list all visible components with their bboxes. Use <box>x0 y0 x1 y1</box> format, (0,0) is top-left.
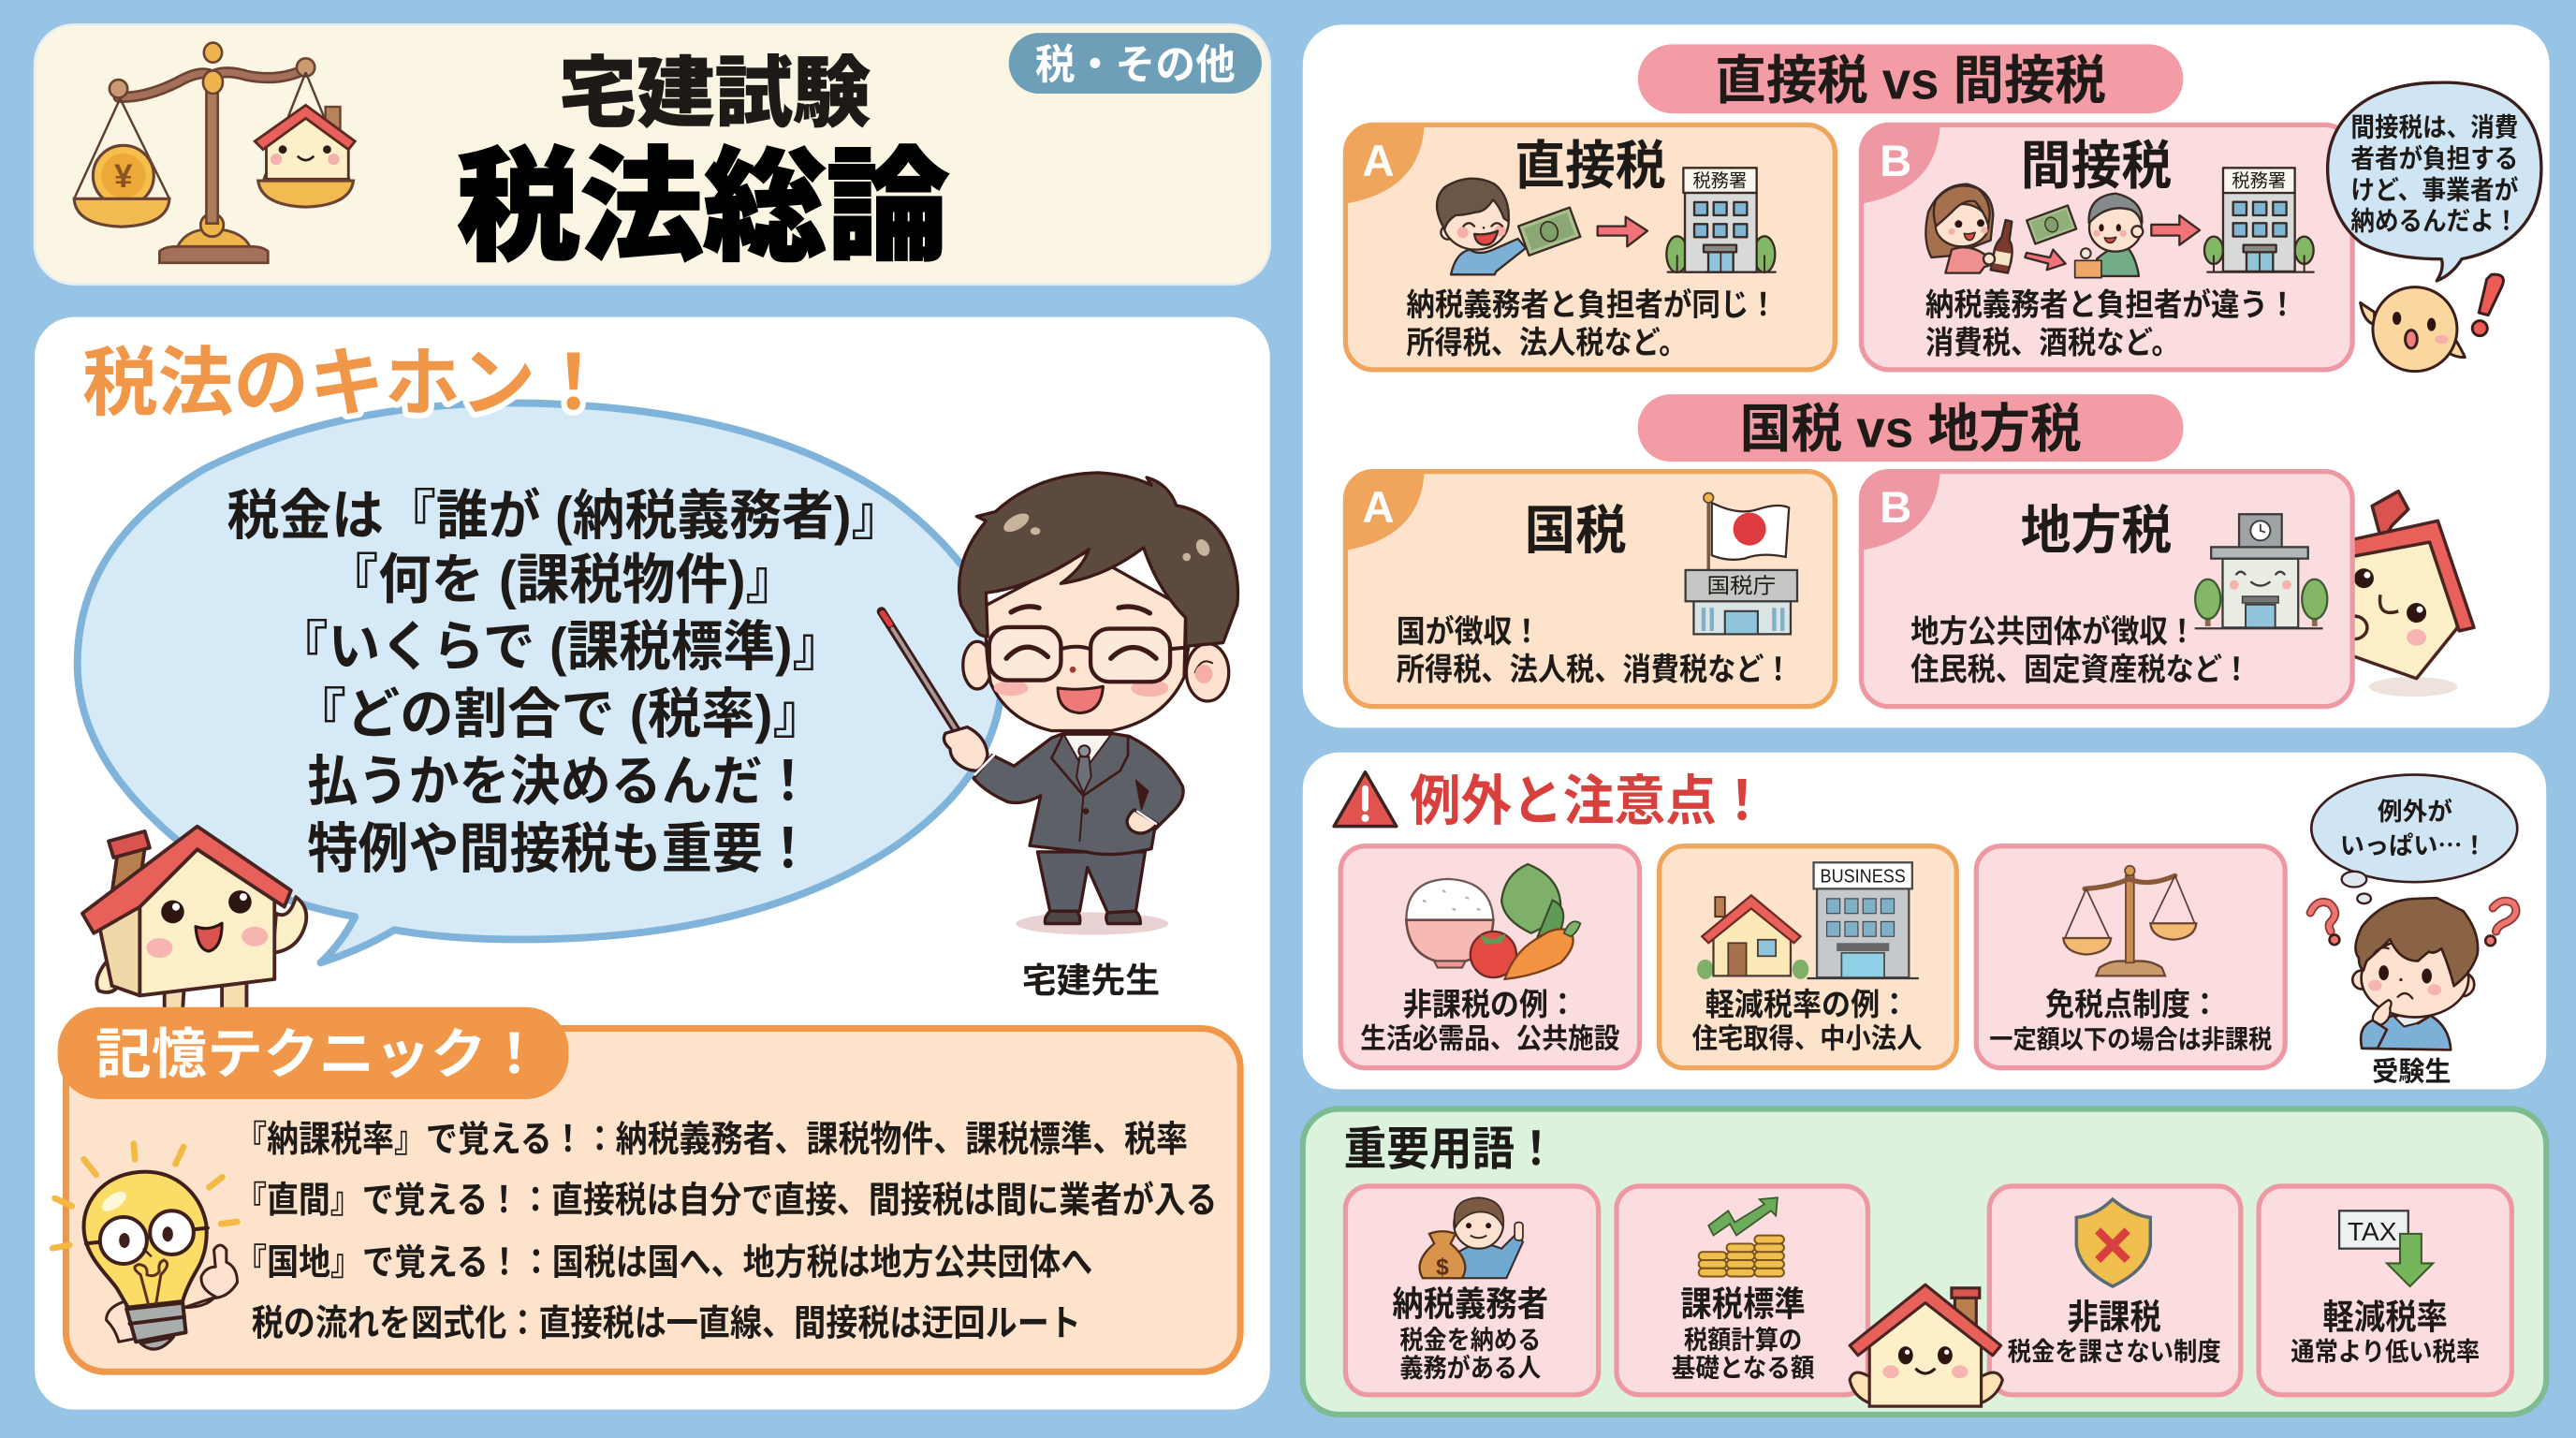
icon: house and business building: BUSINESS <box>1821 866 1906 887</box>
card title: 間接税 <box>2021 137 2172 196</box>
card: taxpayer <box>1345 1186 1599 1395</box>
character: peeking house <box>2333 492 2474 697</box>
card: reduced tax rate <box>2259 1186 2511 1395</box>
icon: flag and National Tax Agency <box>1686 492 1797 634</box>
card: reduced rate example <box>1660 846 1956 1068</box>
card text: 非課税の例： <box>1403 988 1577 1022</box>
card text: 一定額以下の場合は非課税 <box>1989 1025 2272 1054</box>
term text: 納税義務者 <box>1392 1285 1548 1324</box>
technique list <box>235 1120 1218 1344</box>
icon: house and business building <box>1697 862 1919 979</box>
title: 宅建試験: 宅建試験 <box>559 51 871 137</box>
technique list: 税の流れを図式化：直接税は一直線、間接税は迂回ルート <box>252 1304 1081 1344</box>
card title: 地方税 <box>2021 501 2172 560</box>
character: teacher <box>882 473 1237 935</box>
heading: 重要用語: 重要用語！ <box>1344 1124 1558 1175</box>
term text: 通常より低い税率 <box>2291 1337 2480 1366</box>
heading: 例外と注意点: 例外と注意点！ <box>1410 772 1767 832</box>
icon: warning triangle <box>1334 772 1397 827</box>
corner badge A: A <box>1362 137 1395 186</box>
bubble text: 納めるんだよ！ <box>2350 207 2518 236</box>
corner badge B: B <box>1880 137 1911 186</box>
icon: TAX sign with down arrow: TAX <box>2348 1217 2397 1246</box>
bubble text: 『何を (課税物件)』 <box>326 550 798 610</box>
corner badge A <box>1345 472 1425 550</box>
bubble text: 税金は『誰が (納税義務者)』 <box>227 486 903 546</box>
label: 宅建先生: 宅建先生 <box>1022 961 1160 1000</box>
character: house mascot <box>1850 1284 2002 1406</box>
icon: person paying tax office: 税務署 <box>1692 170 1747 191</box>
term text: 課税標準 <box>1680 1285 1806 1324</box>
category tag: 税・その他 <box>1035 42 1236 88</box>
icon: flag and National Tax Agency: 国税庁 <box>1706 573 1776 597</box>
label: 受験生: 受験生 <box>2372 1058 2451 1088</box>
card: indirect tax <box>1861 125 2352 370</box>
card: local tax <box>1861 472 2352 707</box>
card text <box>1397 614 1793 687</box>
card text: 軽減税率の例： <box>1705 988 1909 1022</box>
character: house mascot <box>82 827 306 1012</box>
icon: person paying tax office <box>1437 168 1776 274</box>
comparison pill: national vs local: 国税 vs 地方税 <box>1740 399 2082 458</box>
term text: 税額計算の <box>1684 1326 1802 1355</box>
character: surprised mascot <box>2361 274 2503 372</box>
card text: 所得税、法人税など。 <box>1406 326 1687 360</box>
term text <box>2291 1299 2480 1366</box>
panel: memory techniques <box>52 1007 1240 1372</box>
card title: 国税 <box>1525 501 1626 560</box>
comparison pill: national vs local <box>1638 394 2183 462</box>
corner badge A: A <box>1362 483 1395 533</box>
corner badge A <box>1345 125 1425 204</box>
technique list: 『国地』で覚える！：国税は国へ、地方税は地方公共団体へ <box>235 1243 1092 1284</box>
card text: 免税点制度： <box>2045 988 2219 1022</box>
comparison pill: direct vs indirect <box>1638 44 2183 113</box>
panel: tax comparisons <box>1303 24 2550 727</box>
icon: TAX sign with down arrow <box>2339 1211 2433 1286</box>
bubble text <box>227 486 903 880</box>
card title: 直接税 <box>1515 137 1666 196</box>
icon: person with money bag <box>1420 1197 1523 1281</box>
card text: 消費税、酒税など。 <box>1925 326 2180 360</box>
term text <box>2008 1299 2221 1366</box>
thought bubble: many exceptions: いっぱい…！ <box>2340 826 2487 862</box>
card text: 国が徴収！ <box>1397 614 1541 650</box>
card text: 納税義務者と負担者が違う！ <box>1925 287 2296 323</box>
card text: 所得税、法人税、消費税など！ <box>1397 653 1793 687</box>
bubble text: 『いくらで (課税標準)』 <box>276 618 844 678</box>
icon: consumer, shop owner and tax office <box>1925 168 2314 278</box>
icon: consumer, shop owner and tax office: 税務署 <box>2232 170 2286 191</box>
technique list: 『納課税率』で覚える！：納税義務者、課税物件、課税標準、税率 <box>235 1120 1188 1160</box>
card text: 地方公共団体が徴収！ <box>1910 614 2196 650</box>
heading pill: 記憶テクニック <box>58 1007 568 1099</box>
icon: light bulb with glasses <box>52 1144 238 1349</box>
title: 税法総論: 税法総論 <box>457 139 950 276</box>
comparison pill: direct vs indirect: 直接税 vs 間接税 <box>1715 51 2106 110</box>
card text <box>1406 287 1778 360</box>
card text: 生活必需品、公共施設 <box>1360 1024 1620 1055</box>
panel: tax law basics <box>35 317 1270 1410</box>
bubble text <box>2350 113 2518 236</box>
speech bubble: indirect tax note <box>2328 82 2541 281</box>
heading: 税法のキホン: 税法のキホン！ <box>82 342 611 426</box>
term text <box>1672 1285 1814 1383</box>
panel: key terms <box>1303 1109 2546 1415</box>
term text: 非課税 <box>2068 1299 2161 1337</box>
bubble text: 払うかを決めるんだ！ <box>307 753 813 813</box>
corner badge B: B <box>1880 483 1911 533</box>
icon: shield with cross <box>2076 1199 2150 1286</box>
heading pill: 記憶テクニック: 記憶テクニック！ <box>95 1025 542 1085</box>
bubble text: 『どの割合で (税率)』 <box>293 685 827 745</box>
term text: 基礎となる額 <box>1672 1354 1814 1383</box>
term text <box>1392 1285 1548 1383</box>
corner badge B <box>1861 125 1940 204</box>
card text <box>1360 988 1620 1055</box>
card: tax exemption threshold <box>1976 846 2285 1068</box>
term text: 税金を納める <box>1399 1326 1541 1355</box>
speech bubble: teacher explanation <box>78 403 1003 962</box>
card text <box>1692 988 1923 1055</box>
thought bubble: many exceptions: 例外が <box>2378 798 2452 826</box>
card: non-taxable example <box>1340 846 1640 1068</box>
icon: smiling municipal office <box>2195 514 2327 628</box>
card: tax base <box>1617 1186 1867 1395</box>
bubble text: 間接税は、消費 <box>2350 113 2518 142</box>
card: national tax <box>1345 472 1835 707</box>
card: direct tax <box>1345 125 1835 370</box>
icon: balance scale with coin and house: ¥ <box>114 158 133 195</box>
card text: 住民税、固定資産税など！ <box>1910 653 2250 687</box>
character: worried student <box>2310 898 2516 1049</box>
icon: balance scale with coin and house <box>74 43 355 263</box>
bubble text: 者者が負担する <box>2350 143 2518 173</box>
term text: 義務がある人 <box>1399 1354 1541 1383</box>
icon: balance scale <box>2063 866 2196 976</box>
card text: 住宅取得、中小法人 <box>1692 1024 1923 1055</box>
panel: header <box>35 24 1270 285</box>
icon: coins and rising arrow <box>1699 1197 1784 1277</box>
card text <box>1910 614 2250 687</box>
term text: 軽減税率 <box>2323 1299 2448 1337</box>
bubble text: 特例や間接税も重要！ <box>307 820 813 880</box>
icon: rice and vegetables <box>1406 864 1580 979</box>
bubble text: けど、事業者が <box>2350 174 2518 204</box>
card: non-taxable <box>1989 1186 2241 1395</box>
card text: 納税義務者と負担者が同じ！ <box>1406 287 1778 323</box>
term text: 税金を課さない制度 <box>2008 1337 2221 1366</box>
card text <box>1989 988 2272 1054</box>
corner badge B <box>1861 472 1940 550</box>
icon: person with money bag: $ <box>1436 1255 1449 1281</box>
panel: exceptions and cautions <box>1303 753 2546 1089</box>
card text <box>1925 287 2296 360</box>
technique list: 『直間』で覚える！：直接税は自分で直接、間接税は間に業者が入る <box>235 1181 1218 1221</box>
category tag <box>1009 33 1262 94</box>
thought bubble: many exceptions <box>2311 775 2517 903</box>
